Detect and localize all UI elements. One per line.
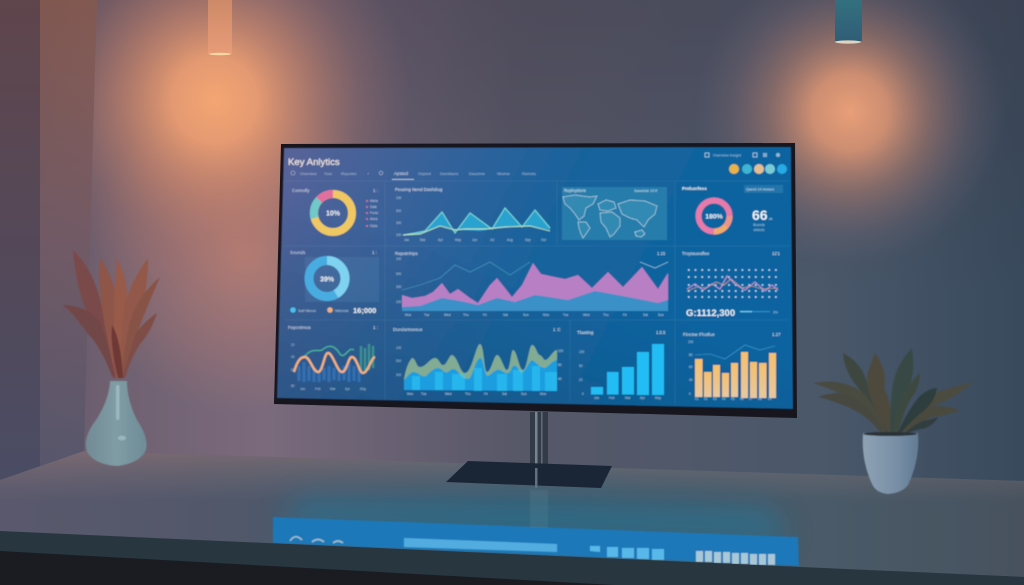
panel: wide purple area chart: Wed: [583, 313, 590, 317]
panel: sine wave chart: 1 :: [373, 325, 378, 330]
panel: layered green and cyan chart: 300: [396, 373, 402, 377]
panel: tan bar chart: 100: [688, 340, 694, 344]
panel: layered green and cyan chart: 1 :C: [553, 327, 561, 332]
panel: dot matrix with wave: Troytaueaflee: [682, 251, 710, 256]
panel: tan bar chart: 1.27: [772, 332, 781, 337]
panel: wide purple area chart: Thu: [603, 313, 609, 317]
panel: wide purple area chart: Sun: [658, 313, 664, 317]
panel: wide purple area chart: Sat: [643, 313, 648, 317]
header status and icons: Overview Insignt: [713, 154, 742, 158]
panel: wide purple area chart: 500: [396, 272, 402, 276]
panel: sine wave chart: Fepcntmus: [288, 325, 311, 330]
panel: layered green and cyan chart: Mon: [540, 392, 546, 396]
panel: tan bar chart: 02: [704, 397, 708, 401]
panel: sounds donut: 39%: [320, 276, 335, 284]
panel: layered green and cyan chart: Sun: [521, 392, 527, 396]
panel: progress donut: Prebanfess: [682, 186, 707, 191]
panel: area line chart: [395, 187, 550, 242]
panel: wide purple area chart: [395, 251, 668, 317]
panel: area line chart: 100: [396, 196, 402, 200]
panel: sine wave chart: 40: [291, 355, 295, 359]
leaves: left plant: [63, 250, 160, 378]
panel: sine wave chart: Jan: [300, 387, 305, 391]
pot: [863, 433, 918, 494]
panel: tan bar chart: 80: [689, 353, 693, 357]
cyan columns: [412, 366, 557, 391]
panel: layered green and cyan chart: 40: [558, 377, 562, 381]
right plant in pot: [813, 348, 973, 494]
navigation menu: Reporter: [341, 171, 357, 176]
panel: regional map: Sawelicle 10:ff: [634, 189, 657, 193]
panel: overview donut: Sale: [370, 205, 377, 209]
navigation menu: +: [367, 171, 370, 176]
right wall lamp: [835, 0, 862, 44]
panel: rising bar chart: Apr: [640, 396, 646, 400]
leaves: right plant: [813, 348, 973, 433]
panel: sine wave chart: [288, 325, 378, 391]
panel: wide purple area chart: 300: [396, 285, 402, 289]
panel: wide purple area chart: Repotnhips: [395, 251, 419, 256]
blue bars: [299, 362, 359, 382]
panel: progress donut: 180%: [705, 214, 723, 220]
panel: dot matrix with wave: G:1112,300: [686, 308, 735, 319]
panel: tan bar chart: 01: [695, 397, 699, 401]
panel: rising bar chart: 20: [579, 378, 583, 382]
panel: sine wave chart: Feb: [315, 387, 321, 391]
panel: progress donut: Qasrst 14 iresson: [746, 188, 774, 192]
navigation menu: [291, 171, 536, 180]
panel: progress donut: 66: [752, 207, 768, 223]
monitor bezel: [274, 143, 797, 418]
panel: tan bar chart: 06: [740, 397, 744, 401]
panel: sine wave chart: May: [360, 387, 366, 391]
dashboard title: Key Anlytics: [288, 157, 340, 168]
table surface: [0, 451, 1024, 577]
panel: tan bar chart: [683, 332, 781, 401]
panel: tan bar chart: 0: [689, 392, 691, 396]
panel: progress donut: .m: [768, 216, 773, 221]
panel: progress donut: [682, 185, 783, 232]
panel: layered green and cyan chart: Fri: [484, 392, 488, 396]
panel: dot matrix with wave: 12'1: [772, 251, 780, 256]
panel: sounds donut: 1 :: [372, 250, 377, 255]
panel: sine wave chart: 80: [291, 384, 295, 388]
vase: [86, 381, 147, 466]
panel: area line chart: Peusing Nend Dashdiug: [395, 187, 443, 192]
panel: rising bar chart: Feb: [609, 396, 615, 400]
monitor stand: [446, 412, 612, 488]
panel: overview donut: Fund: [370, 211, 378, 215]
navigation menu: Ospent: [418, 171, 432, 176]
panel: wide purple area chart: Mon: [543, 313, 549, 317]
panel: wide purple area chart: 100: [396, 300, 402, 304]
panel: sounds donut: Sounds: [290, 250, 306, 255]
navigation menu: Dandiaurs: [440, 171, 458, 176]
panel: sine wave chart: 20: [291, 343, 295, 347]
panel: area line chart: Mar: [420, 238, 426, 242]
panel: overview donut: Area: [370, 217, 377, 221]
panel: area line chart: 500: [396, 209, 402, 213]
panel: area line chart: Jun: [472, 238, 477, 242]
reflection of the screen on the table: [273, 490, 799, 566]
panel: overview donut: 1 :: [373, 188, 378, 193]
panel: wide purple area chart: Tue: [563, 313, 569, 317]
panel: wide purple area chart: Sat: [503, 313, 508, 317]
panel: wide purple area chart: Tue: [424, 313, 430, 317]
panel: overview donut: Connolly: [292, 188, 310, 193]
panel: layered green and cyan chart: 100: [396, 346, 402, 350]
panel: layered green and cyan chart: Dundartowsus: [393, 327, 423, 332]
green bars: [361, 344, 373, 372]
panel: wide purple area chart: 1.15: [657, 251, 666, 256]
panel: tan bar chart: 07: [749, 397, 753, 401]
panel: rising bar chart: May: [655, 396, 661, 400]
panel: tan bar chart: 40: [689, 378, 693, 382]
panel: layered green and cyan chart: 500: [396, 359, 402, 363]
panel: dot matrix with wave: [682, 251, 780, 319]
panel: rising bar chart: 0: [582, 392, 584, 396]
panel: layered green and cyan chart: 80: [558, 363, 562, 367]
panel: tan bar chart: 09: [768, 397, 772, 401]
panel: area line chart: 300: [396, 221, 402, 225]
panel: layered green and cyan chart: Wed: [445, 392, 452, 396]
navigation menu: Your: [324, 171, 333, 176]
panel: progress donut: detects: [754, 228, 765, 232]
panel: rising bar chart: Jan: [594, 396, 599, 400]
navigation menu: Nfurine: [497, 171, 511, 176]
left wall pillar: [0, 0, 97, 480]
panel: area line chart: Aug: [507, 238, 513, 242]
panel: layered green and cyan chart: Mon: [407, 392, 413, 396]
panel: area line chart: Jan: [404, 238, 409, 242]
donut legend: [290, 306, 376, 315]
donut legend: Salf Mexor: [298, 309, 317, 313]
panel: rising bar chart: Mar: [625, 396, 631, 400]
panel: layered green and cyan chart: [393, 327, 564, 396]
panel: overview donut: Data: [370, 224, 377, 228]
panel: regional map: [562, 187, 667, 240]
panel: wide purple area chart: Wed: [444, 313, 451, 317]
panel: area line chart: Apr: [438, 238, 444, 242]
panel: sine wave chart: 60: [291, 368, 295, 372]
panel: layered green and cyan chart: Thu: [465, 392, 471, 396]
panel: area line chart: Jul: [490, 238, 494, 242]
dot grid: [688, 270, 779, 297]
left wall lamp: [208, 0, 232, 55]
panel: wide purple area chart: 100: [396, 257, 402, 261]
panel: wide purple area chart: Fri: [483, 313, 487, 317]
panel: dot matrix with wave: 3%: [773, 310, 778, 314]
panel dividers: [284, 181, 790, 405]
panel: tan bar chart: 08: [758, 397, 762, 401]
panel: rising bar chart: 1.5.5: [656, 330, 666, 335]
table front edge: [0, 531, 1024, 585]
panel: overview donut: [292, 188, 378, 232]
panel: layered green and cyan chart: Tue: [421, 392, 427, 396]
panel: sounds donut: [290, 250, 379, 315]
navigation menu: Dauctme: [469, 171, 486, 176]
world map outline: [563, 195, 657, 238]
panel: overview donut: Meta: [370, 199, 378, 203]
panel: tan bar chart: 60: [689, 365, 693, 369]
panel: rising bar chart: 50: [579, 364, 583, 368]
donut legend: Nitchols: [335, 309, 349, 313]
panel: area line chart: 100: [396, 233, 402, 237]
user status circles: [729, 164, 787, 174]
panel: tan bar chart: Fincine Fhotfue: [683, 332, 715, 337]
panel: area line chart: Sep: [525, 238, 531, 242]
navigation menu: Apsted: [394, 171, 409, 176]
panel: wide purple area chart: Thu: [463, 313, 469, 317]
panel: tan bar chart: 04: [722, 397, 726, 401]
panel: sine wave chart: Mar: [330, 387, 336, 391]
panel: progress donut: Bounds: [753, 223, 765, 227]
panel: tan bar chart: 05: [731, 397, 735, 401]
panel: layered green and cyan chart: 120: [558, 349, 564, 353]
donut legend: 16;000: [353, 306, 376, 315]
panel: wide purple area chart: Fri: [623, 313, 627, 317]
monitor screen: [277, 147, 793, 409]
panel: area line chart: May: [455, 238, 461, 242]
navigation menu: Overview: [300, 171, 317, 176]
panel: layered green and cyan chart: Sat: [502, 392, 507, 396]
panel: sine wave chart: Apr: [345, 387, 351, 391]
header status and icons: [705, 153, 780, 158]
panel: regional map: Reploytions: [564, 188, 586, 193]
panel: overview donut: 10%: [326, 210, 341, 218]
panel: area line chart: Oct: [541, 238, 546, 242]
panel: wide purple area chart: Sun: [523, 313, 529, 317]
panel: rising bar chart: [577, 330, 666, 400]
panel: rising bar chart: 100: [579, 350, 585, 354]
left plant in vase: [63, 250, 160, 466]
panel: wide purple area chart: Mon: [405, 313, 411, 317]
navigation menu: Ramets: [522, 171, 536, 176]
panel: tan bar chart: 03: [713, 397, 717, 401]
panel: rising bar chart: Tlaating: [577, 330, 594, 335]
